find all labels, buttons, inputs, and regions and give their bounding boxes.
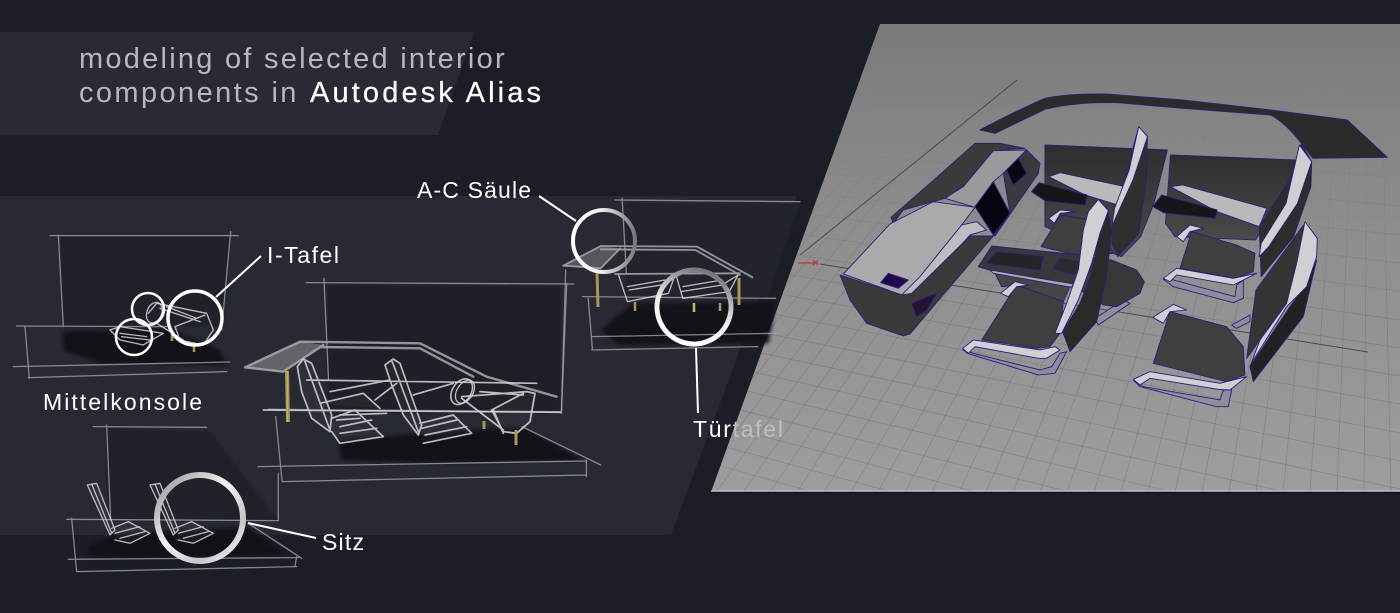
frame strokes bbox=[13, 232, 238, 378]
perspective grid bbox=[716, 170, 1400, 490]
rear left seat back bbox=[1112, 127, 1147, 257]
seat 1 strokes bbox=[87, 483, 150, 543]
dashboard top surface bbox=[843, 202, 975, 295]
seat D frame bbox=[1133, 380, 1232, 407]
seat C hinge bbox=[1177, 225, 1203, 242]
gold door supports bbox=[635, 302, 720, 312]
sketch: A-C pillar and door vignette bbox=[561, 198, 800, 413]
floor shadow bbox=[601, 302, 776, 345]
right front seat back bbox=[1259, 143, 1312, 277]
console leg bbox=[1095, 300, 1130, 325]
console cup holder bbox=[1053, 258, 1080, 275]
dashboard rim bbox=[902, 222, 987, 295]
small screen bbox=[1007, 158, 1027, 185]
dash vent bbox=[912, 293, 937, 317]
dashboard upper shell bbox=[891, 143, 1025, 223]
dash control pad bbox=[881, 273, 908, 288]
roof underside bbox=[245, 342, 323, 372]
label: Mittelkonsole: Mittelkonsole bbox=[43, 389, 202, 415]
label: Sitz: Sitz bbox=[322, 529, 364, 555]
dashboard front face bbox=[840, 236, 993, 336]
door trim left bbox=[1049, 173, 1125, 205]
frame strokes bbox=[561, 198, 800, 413]
title line 2: components in bbox=[79, 77, 299, 109]
steering wheel bbox=[446, 375, 477, 408]
origin marker bbox=[798, 260, 818, 265]
ring: steering detail bbox=[132, 293, 164, 325]
viewport bottom edge bbox=[711, 490, 1400, 492]
sketch: instrument panel vignette bbox=[13, 232, 238, 378]
centre screen bbox=[975, 182, 1010, 235]
front interior model parts bbox=[963, 199, 1317, 407]
floor shadow bbox=[88, 527, 287, 558]
label: I-Tafel: I-Tafel bbox=[267, 242, 339, 268]
seat D hinge bbox=[1153, 304, 1187, 323]
floor shadow bbox=[63, 328, 227, 365]
dashboard side strip bbox=[993, 150, 1040, 236]
dashboard model bbox=[840, 143, 1040, 336]
seat C bar bbox=[1163, 268, 1257, 285]
seat D strip bbox=[1250, 222, 1317, 367]
roof underside bbox=[563, 246, 620, 268]
wall bbox=[60, 237, 230, 327]
roof strokes bbox=[245, 342, 557, 397]
rear left seat hinge bbox=[1049, 210, 1076, 223]
right front seat strip bbox=[1259, 145, 1312, 257]
seat D leg bbox=[1232, 315, 1250, 328]
gold pillars door view bbox=[597, 272, 739, 307]
title line 1: modeling of selected interior bbox=[79, 43, 507, 75]
viewport shadow edge bbox=[711, 492, 1400, 494]
ring: centre console bbox=[116, 319, 152, 355]
seat C cushion bbox=[1180, 232, 1255, 278]
title emphasis: Autodesk Alias bbox=[310, 77, 541, 109]
seat D back shell bbox=[1250, 260, 1317, 382]
steering wheel strokes bbox=[144, 300, 165, 325]
small gold supports bbox=[172, 334, 194, 352]
console light strip bbox=[990, 270, 1073, 287]
panel: title band bbox=[0, 32, 474, 135]
door trim right bbox=[1170, 185, 1267, 227]
panel: Alias 3D viewport bbox=[711, 24, 1400, 493]
steering wheel inner rim bbox=[451, 377, 478, 407]
armrest right bbox=[1153, 195, 1217, 218]
armrest left bbox=[1032, 183, 1087, 205]
sketch: seat vignette bbox=[67, 425, 302, 572]
seat A frame bbox=[963, 349, 1067, 375]
front door panel bbox=[1165, 155, 1296, 240]
ring: A-C pillar bbox=[573, 210, 635, 272]
rear left seat cushion bbox=[1041, 215, 1114, 257]
panel: sketch band bbox=[0, 196, 797, 535]
wall bbox=[626, 203, 800, 297]
seat D back panel bbox=[1247, 223, 1305, 358]
label: A-C Säule: A-C Säule bbox=[417, 177, 531, 203]
leader lines bbox=[216, 196, 698, 538]
door strokes bbox=[619, 273, 738, 302]
ring: door panel bbox=[647, 260, 741, 354]
rear door panel bbox=[1045, 145, 1167, 257]
seat A back shell bbox=[1063, 212, 1112, 352]
sketch: full cabin walls and floor bbox=[258, 278, 601, 482]
roof strokes bbox=[563, 246, 752, 277]
seat C frame bbox=[1163, 279, 1243, 303]
frame strokes bbox=[67, 425, 302, 572]
floor shadow bbox=[338, 427, 583, 463]
ring: instrument panel bbox=[168, 291, 222, 345]
frame strokes bbox=[258, 278, 601, 482]
seat A bar bbox=[963, 340, 1060, 358]
wall bbox=[107, 428, 278, 520]
dashboard far surface bbox=[945, 150, 1027, 207]
seat A hinge bbox=[1001, 282, 1028, 297]
rear interior model parts bbox=[980, 94, 1387, 277]
roof rail bbox=[980, 94, 1387, 158]
instrument panel strokes bbox=[110, 303, 213, 345]
viewport surface bbox=[711, 24, 1400, 492]
ring: seat bbox=[157, 475, 243, 561]
gold pillar rear bbox=[287, 371, 288, 422]
rear left seat strip bbox=[1112, 127, 1147, 227]
viewport axes bbox=[800, 80, 1368, 352]
seat D cushion bbox=[1153, 312, 1245, 382]
seat A cushion bbox=[982, 285, 1063, 348]
centre console wedge bbox=[995, 273, 1070, 302]
sketch: full cabin interior bbox=[245, 342, 560, 443]
label: Türtafel: Türtafel bbox=[693, 416, 783, 442]
wall bbox=[327, 285, 561, 413]
title bbox=[79, 43, 541, 109]
seat strokes bbox=[263, 359, 560, 443]
seat A strip bbox=[1055, 199, 1108, 333]
seat 2 strokes bbox=[150, 483, 213, 543]
seat D bar bbox=[1133, 372, 1247, 390]
console tray bbox=[987, 252, 1043, 270]
gold pillar dashboard bbox=[484, 421, 516, 445]
dashboard strokes bbox=[462, 392, 535, 433]
centre console bbox=[978, 246, 1144, 307]
